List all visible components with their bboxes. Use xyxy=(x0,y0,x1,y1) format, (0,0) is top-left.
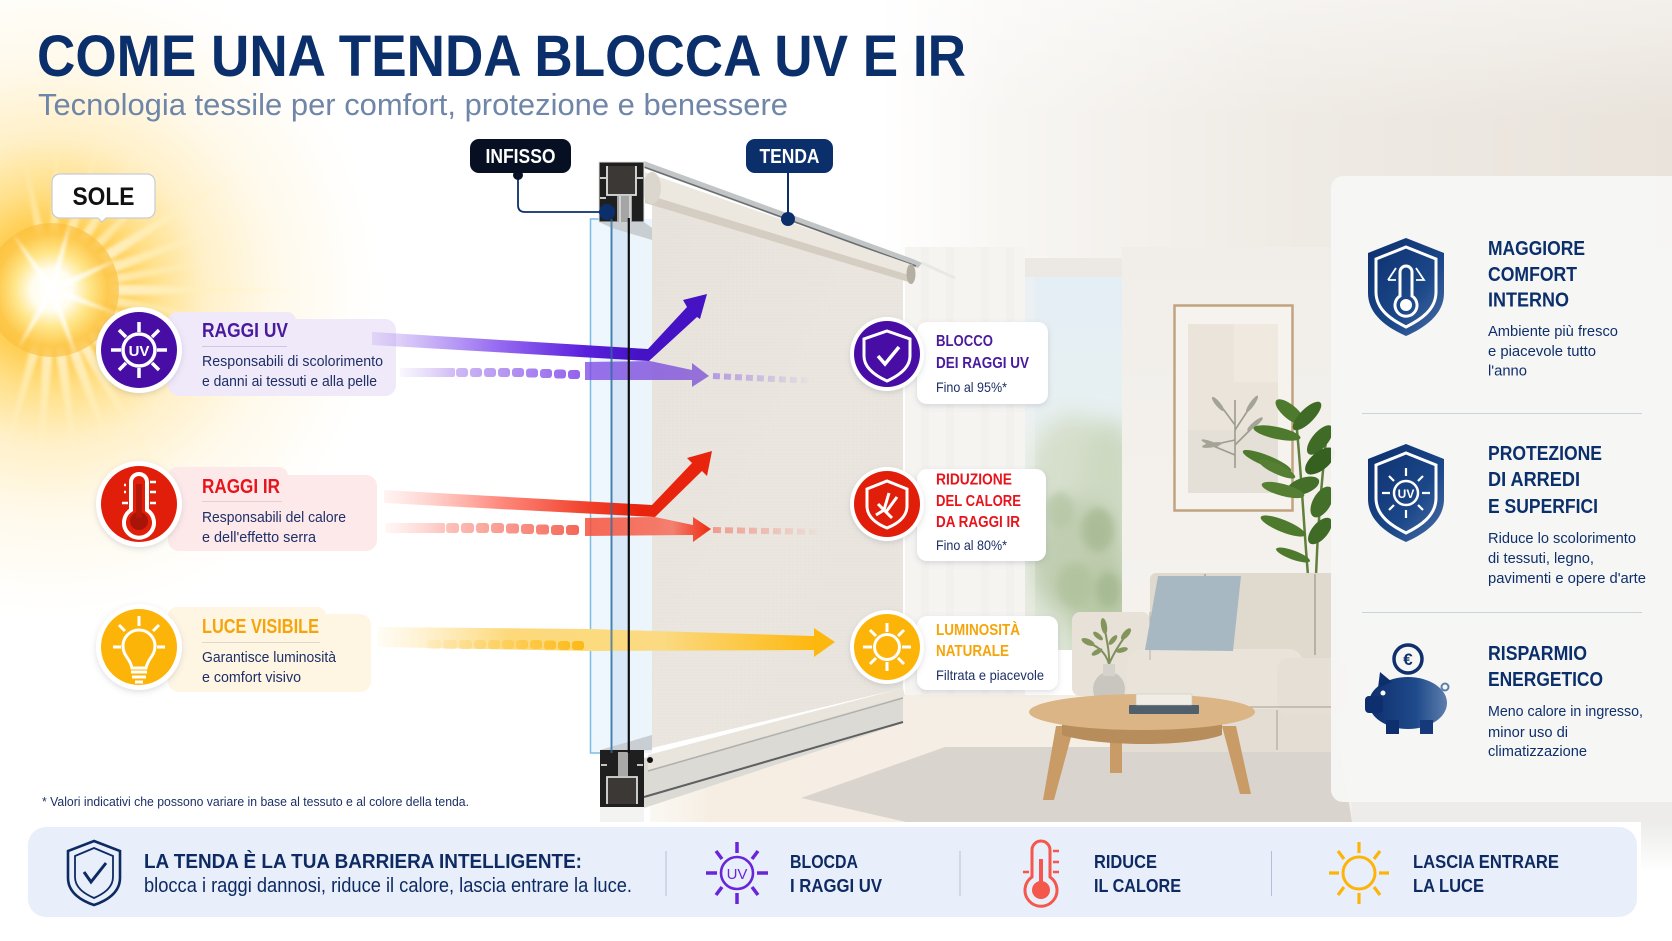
text: descrizione IR: e dell'effetto serra xyxy=(202,529,317,546)
panel: luce visibile xyxy=(96,604,371,692)
tag: tenda xyxy=(746,139,833,226)
icon: piggy bank xyxy=(1365,645,1448,734)
icon: piggy bank: € xyxy=(1403,650,1413,669)
panel: benefici xyxy=(1331,176,1672,802)
heading: risparmio: ENERGETICO xyxy=(1488,669,1603,691)
rug xyxy=(801,747,1352,822)
deflected UV ray xyxy=(372,294,707,361)
heading: comfort: COMFORT xyxy=(1488,264,1577,286)
icon: shield check outline xyxy=(68,841,120,905)
sun rays xyxy=(0,119,340,528)
icon: shield UV xyxy=(1368,444,1444,542)
window with garden xyxy=(1025,258,1122,650)
heading: luminosita: LUMINOSITÀ xyxy=(936,620,1020,639)
tag: infisso: INFISSO xyxy=(486,146,556,168)
icon: shield check xyxy=(850,317,924,391)
heading: blocco: BLOCCO xyxy=(936,333,993,350)
arrow: visible light xyxy=(378,627,835,657)
heading: comfort: INTERNO xyxy=(1488,290,1569,312)
text: descrizione luce: Garantisce luminosità xyxy=(202,649,337,666)
deflected IR ray xyxy=(384,451,712,517)
icon: shield heat xyxy=(850,467,924,541)
heading: riduzione: RIDUZIONE xyxy=(936,472,1012,488)
glass edge lines over arrows xyxy=(610,219,612,753)
callout: riduzione calore xyxy=(850,467,1046,561)
heading: blocco: DEI RAGGI UV xyxy=(936,355,1029,372)
transmitted UV ray xyxy=(585,361,709,387)
tag: tenda: TENDA xyxy=(760,146,820,168)
text: descrizione luce: e comfort visivo xyxy=(202,669,301,686)
text: protezione: pavimenti e opere d'arte xyxy=(1488,570,1646,587)
subtitle: Tecnologia tessile per comfort, protezione e benessere xyxy=(38,87,788,122)
item: riduce il calore: RIDUCE xyxy=(1094,852,1157,872)
heading: risparmio: RISPARMIO xyxy=(1488,643,1587,665)
floor under panel xyxy=(1352,800,1672,822)
heading: riduzione: DEL CALORE xyxy=(936,493,1021,510)
glass xyxy=(590,219,652,753)
text: risparmio: climatizzazione xyxy=(1488,743,1587,760)
heading: raggi IR: RAGGI IR xyxy=(202,476,280,498)
panel: raggi IR xyxy=(96,461,377,551)
heading: protezione: E SUPERFICI xyxy=(1488,496,1598,518)
value: 95%: Fino al 95%* xyxy=(936,379,1007,395)
arrow: IR rays xyxy=(384,451,825,542)
item: lascia entrare la luce: LASCIA ENTRARE xyxy=(1413,852,1559,872)
tag: infisso xyxy=(470,139,615,220)
icon: shield UV: UV xyxy=(1398,487,1414,501)
text: barriera intelligente: LA TENDA È LA TUA BARRIERA INTELLIGENTE: xyxy=(144,850,582,873)
icon: thermometer xyxy=(96,461,182,547)
text: risparmio: Meno calore in ingresso, xyxy=(1488,703,1643,720)
text: descrizione UV: Responsabili di scolorimento xyxy=(202,353,383,370)
heading: comfort: MAGGIORE xyxy=(1488,238,1585,260)
heading: protezione: DI ARREDI xyxy=(1488,469,1580,491)
vase and books xyxy=(1080,618,1133,706)
text: descrizione UV: e danni ai tessuti e alla pelle xyxy=(202,373,377,390)
callout: luminosita naturale xyxy=(850,610,1058,690)
incoming IR dashes xyxy=(385,523,579,535)
sofa xyxy=(1072,573,1347,752)
window cross-section xyxy=(590,161,955,822)
callout: blocco raggi UV xyxy=(850,317,1048,404)
label: sole xyxy=(52,174,155,222)
icon: thermometer outline xyxy=(1023,841,1059,906)
heading: luminosita: NATURALE xyxy=(936,643,1009,660)
text: protezione: di tessuti, legno, xyxy=(1488,550,1594,567)
heading: riduzione: DA RAGGI IR xyxy=(936,514,1020,531)
text: protezione: Riduce lo scolorimento xyxy=(1488,530,1636,547)
top rail and roller xyxy=(643,161,955,284)
plant xyxy=(1241,395,1340,575)
benefit: comfort xyxy=(1368,238,1618,380)
arrow: UV rays xyxy=(372,294,815,387)
bottom rail xyxy=(644,688,905,808)
sun xyxy=(0,0,420,640)
icon: light bulb xyxy=(96,604,182,690)
text: comfort: Ambiente più fresco xyxy=(1488,323,1618,340)
title: COME UNA TENDA BLOCCA UV E IR xyxy=(37,24,966,89)
heading: protezione: PROTEZIONE xyxy=(1488,443,1602,465)
icon: shield thermometer xyxy=(1368,238,1444,336)
value: 80%: Fino al 80%* xyxy=(936,537,1007,553)
heading: raggi UV: RAGGI UV xyxy=(202,320,289,342)
coffee table xyxy=(1029,694,1255,800)
bottom bar xyxy=(25,823,1641,919)
background room scene xyxy=(650,0,1672,852)
footnote: * Valori indicativi che possono variare in base al tessuto e al colore della tenda. xyxy=(42,794,469,809)
icon: UV sun xyxy=(96,307,182,393)
icon: sun xyxy=(850,610,924,684)
text: comfort: e piacevole tutto xyxy=(1488,343,1596,360)
transmitted IR ray xyxy=(585,517,711,542)
benefit: protezione xyxy=(1368,443,1646,587)
benefit: risparmio xyxy=(1365,643,1643,760)
item: riduce il calore xyxy=(1023,841,1181,906)
text: comfort: l'anno xyxy=(1488,362,1527,380)
item: blocda raggi UV: I RAGGI UV xyxy=(790,876,882,896)
fabric roller blind xyxy=(652,203,903,748)
icon: UV sun outline xyxy=(706,842,768,904)
label: sole: SOLE xyxy=(72,183,134,211)
cushion xyxy=(1145,576,1241,651)
icon: UV sun outline: UV xyxy=(727,866,747,883)
wall picture xyxy=(1174,306,1292,510)
text: barriera intelligente: blocca i raggi dannosi, riduce il calore, lascia entrare la luce. xyxy=(144,875,632,897)
text: barriera intelligente xyxy=(144,850,632,897)
panel: raggi UV xyxy=(96,307,396,396)
icon: sun outline xyxy=(1329,842,1389,904)
text: risparmio: minor uso di xyxy=(1488,724,1568,741)
icon: UV sun: UV xyxy=(129,343,149,360)
item: riduce il calore: IL CALORE xyxy=(1094,876,1181,896)
bottom frame profile xyxy=(600,735,652,822)
item: lascia entrare la luce: LA LUCE xyxy=(1413,876,1484,896)
item: blocda raggi UV xyxy=(706,842,882,904)
text: descrizione IR: Responsabili del calore xyxy=(202,509,346,526)
item: blocda raggi UV: BLOCDA xyxy=(790,852,858,872)
heading: luce visibile: LUCE VISIBILE xyxy=(202,616,319,638)
item: lascia entrare la luce xyxy=(1329,842,1559,904)
text: filtrata: Filtrata e piacevole xyxy=(936,667,1044,683)
incoming UV dashes xyxy=(400,368,580,379)
top frame profile xyxy=(599,162,652,240)
